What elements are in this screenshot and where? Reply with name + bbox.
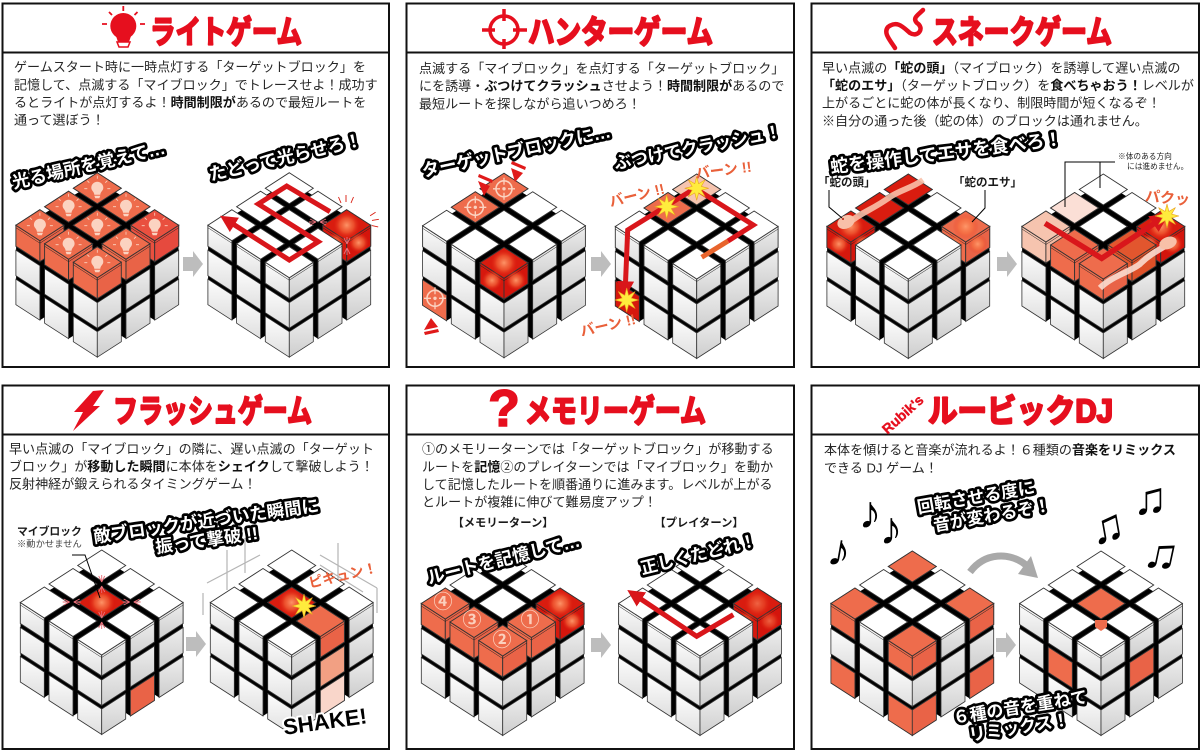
description: ゲームスタート時に一時点灯する「ターゲットブロック」を bbox=[14, 60, 366, 74]
arrow bbox=[186, 631, 206, 657]
description line 3: 反射神経が鍛えられるタイミングゲーム！ bbox=[9, 477, 257, 492]
shake lines bbox=[203, 538, 377, 615]
panel frame bbox=[406, 386, 794, 749]
description line 3: るとライトが点灯するよ！時間制限があるので最短ルートを bbox=[14, 95, 366, 110]
icon: snake bbox=[886, 10, 923, 48]
title: ハンターゲーム bbox=[528, 14, 713, 50]
route numbers: ① bbox=[520, 609, 540, 631]
description line 2: ブロック」が移動した瞬間に本体をシェイクして撃破しよう！ bbox=[9, 459, 374, 474]
route numbers: ② bbox=[492, 629, 512, 651]
shake text: SHAKE! bbox=[281, 703, 368, 740]
panel: ライトゲーム bbox=[2, 4, 389, 367]
icon: lightning bbox=[73, 390, 104, 431]
logo: Rubik's: Rubik's bbox=[879, 391, 927, 437]
sound text: バーン !! bbox=[579, 312, 637, 340]
arrow bbox=[591, 632, 611, 658]
sound text: パクッ bbox=[1144, 188, 1191, 209]
music notes: ♫ bbox=[1086, 497, 1129, 555]
description line 4: ※自分の通った後（蛇の体）のブロックは通れません。 bbox=[822, 113, 1148, 128]
label: マイブロック bbox=[17, 524, 82, 538]
callout: ルートを記憶して… bbox=[425, 530, 582, 588]
note: ※体のある方向 bbox=[1118, 151, 1172, 161]
music notes: ♫ bbox=[1140, 524, 1184, 582]
label: 「蛇の頭」 bbox=[818, 175, 876, 189]
curved arrow bbox=[970, 556, 1038, 578]
callout: ターゲットブロックに… bbox=[420, 121, 612, 181]
cube: my block bbox=[20, 550, 183, 734]
callout: 正しくたどれ！ bbox=[639, 531, 759, 578]
target markers bbox=[424, 161, 526, 335]
icon: question mark: ? bbox=[488, 380, 520, 438]
leader line bbox=[72, 555, 100, 598]
title: メモリーゲーム bbox=[525, 393, 706, 429]
cube: snake eats bbox=[1022, 174, 1185, 358]
explosions bbox=[615, 176, 709, 312]
route numbers: ④ bbox=[433, 591, 453, 613]
callout: 音が変わるぞ！ bbox=[932, 495, 1052, 535]
cube: targets bbox=[423, 173, 585, 358]
description line 3: 上がるごとに蛇の体が長くなり、制限時間が短くなるぞ！ bbox=[822, 96, 1161, 111]
red route arrow bbox=[640, 598, 733, 636]
panel frame bbox=[812, 4, 1199, 367]
panel: スネークゲーム bbox=[812, 4, 1199, 367]
explosion bbox=[1155, 204, 1179, 228]
arrow bbox=[183, 251, 203, 277]
note line 2: には進めません。 bbox=[1127, 161, 1188, 171]
sparks bbox=[309, 195, 380, 255]
label: 「蛇のエサ」 bbox=[953, 175, 1022, 189]
callout: 敵ブロックが近づいた瞬間に bbox=[92, 495, 320, 547]
icon: light bulb bbox=[102, 6, 145, 47]
description: 本体を傾けると音楽が流れるよ！６種類の音楽をリミックス bbox=[824, 443, 1176, 458]
callout: ぶつけてクラッシュ！ bbox=[613, 122, 783, 173]
route numbers: ③ bbox=[462, 609, 482, 631]
cube: pattern two bbox=[1020, 551, 1182, 736]
cube: trace route bbox=[208, 173, 371, 357]
description line 4: とルートが複雑に伸びて難易度アップ！ bbox=[422, 495, 657, 510]
cube: memory route bbox=[421, 551, 584, 736]
cube: play route bbox=[619, 551, 781, 736]
panel: ハンターゲーム bbox=[406, 4, 794, 367]
music notes: ♫ bbox=[1133, 472, 1167, 524]
cube: all lit bbox=[16, 173, 179, 357]
panel frame bbox=[406, 4, 794, 367]
arrow bbox=[591, 251, 611, 277]
explosion bbox=[292, 594, 316, 618]
snake body bbox=[835, 180, 923, 232]
description line 2: 記憶して、点滅する「マイブロック」でトレースせよ！成功す bbox=[14, 78, 378, 92]
label note: ※動かせません bbox=[17, 539, 82, 549]
panel: フラッシュゲーム bbox=[2, 386, 389, 749]
description: 早い点滅の「蛇の頭」（マイブロック）を誘導して遅い点滅の bbox=[822, 61, 1180, 76]
description line 2: 「蛇のエサ」（ターゲットブロック）を食べちゃおう！レベルが bbox=[822, 78, 1194, 93]
callout: リミックス！ bbox=[968, 710, 1071, 745]
label: 【メモリーターン】 bbox=[452, 516, 554, 530]
music notes: ♪ bbox=[858, 486, 882, 538]
callout: 振って撃破 !! bbox=[154, 523, 259, 557]
callout: ６種の音を重ねて bbox=[951, 687, 1089, 728]
music notes: ♪ bbox=[824, 522, 855, 578]
description line 3: 最短ルートを探しながら追いつめろ！ bbox=[419, 96, 641, 111]
callout: 回転させる度に bbox=[916, 478, 1036, 517]
label: 【プレイターン】 bbox=[654, 516, 744, 530]
panel: メモリーゲーム bbox=[406, 380, 794, 749]
description: 点滅する「マイブロック」を点灯する「ターゲットブロック」 bbox=[419, 61, 784, 76]
description line 2: できる DJ ゲーム！ bbox=[824, 460, 938, 475]
route numbers bbox=[433, 591, 540, 651]
title: ライトゲーム bbox=[150, 14, 302, 50]
route: start bbox=[702, 241, 728, 257]
description line 3: して記憶したルートを順番通りに進みます。レベルが上がる bbox=[422, 477, 773, 492]
arrow bbox=[997, 251, 1017, 277]
callout: 蛇を操作してエサを食べろ！ bbox=[829, 129, 1063, 177]
callout: たどって光らせろ！ bbox=[207, 130, 364, 184]
description: ①のメモリーターンでは「ターゲットブロック」が移動する bbox=[422, 442, 774, 457]
panel: ルービックDJ bbox=[812, 386, 1199, 749]
panel frame bbox=[2, 4, 389, 367]
red route arrow bbox=[1045, 223, 1155, 258]
icon: crosshair bbox=[482, 9, 527, 49]
title: ルービックDJ bbox=[928, 393, 1113, 429]
music notes: ♪ bbox=[880, 502, 902, 554]
description line 4: 通って選ぼう！ bbox=[14, 112, 105, 128]
description line 2: ルートを記憶②のプレイターンでは「マイブロック」を動か bbox=[422, 459, 773, 474]
callout: 光る場所を覚えて… bbox=[10, 138, 167, 193]
music notes bbox=[824, 472, 1184, 582]
title: スネークゲーム bbox=[932, 14, 1112, 50]
sound text: ピキュン！ bbox=[307, 559, 379, 591]
description line 2: にを誘導・ぶつけてクラッシュさせよう！時間制限があるので bbox=[419, 79, 784, 94]
red route arrow bbox=[233, 186, 330, 260]
cube: snake start bbox=[827, 174, 990, 358]
cube: shake bbox=[210, 550, 373, 734]
panel frame bbox=[2, 386, 389, 749]
bracket lines bbox=[1065, 162, 1115, 207]
panel frame bbox=[812, 386, 1199, 749]
cube: crash bbox=[615, 174, 778, 358]
title: フラッシュゲーム bbox=[113, 393, 312, 429]
sound text: バーン !! bbox=[695, 160, 753, 182]
cube: pattern one bbox=[831, 551, 994, 736]
snake trail bbox=[1100, 234, 1179, 288]
route: red bbox=[626, 188, 753, 283]
arrow bbox=[996, 632, 1016, 658]
description: 早い点滅の「マイブロック」の隣に、遅い点滅の「ターゲット bbox=[9, 442, 374, 457]
sound text: バーン !! bbox=[608, 182, 666, 211]
leader lines bbox=[829, 190, 985, 222]
